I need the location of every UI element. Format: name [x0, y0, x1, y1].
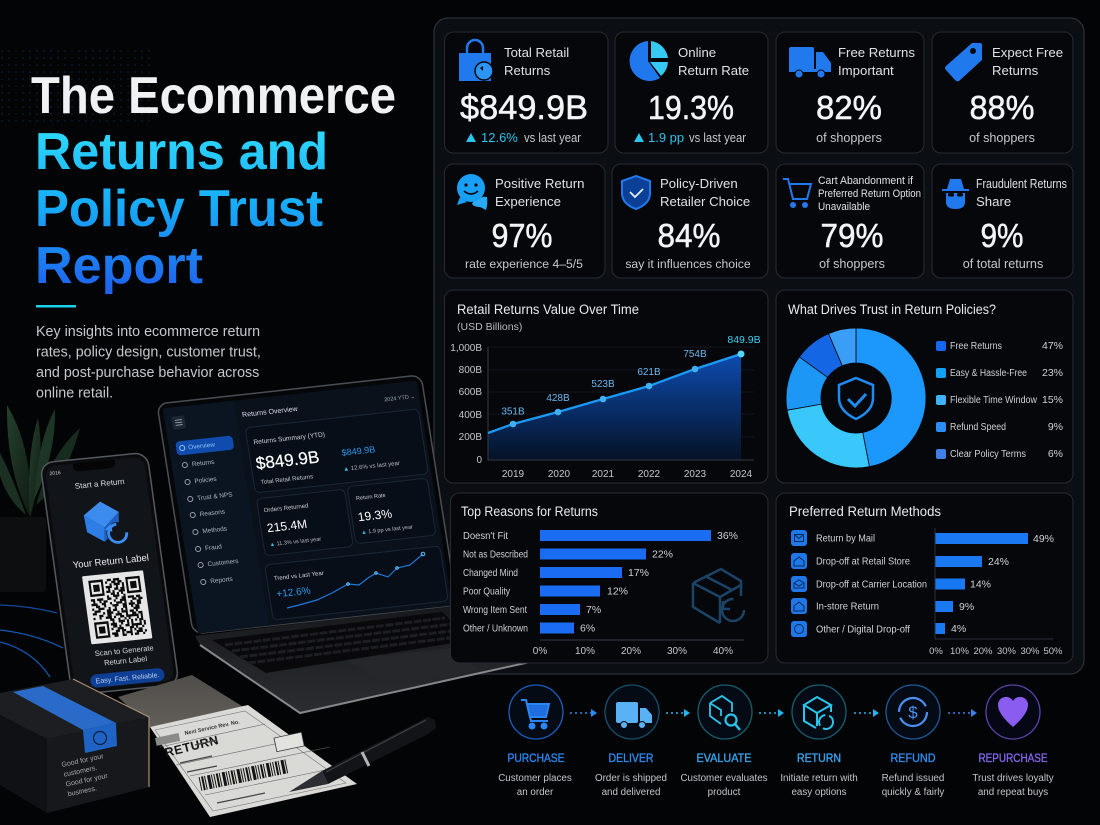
sidebar navigation: Trust & NPS [197, 491, 233, 502]
panel: trust drivers donut chart: What Drives Trust in Return Policies? [788, 302, 996, 317]
x axis labels: 10% [950, 646, 970, 657]
values: 17% [628, 567, 649, 579]
x axis labels: 40% [713, 646, 733, 657]
returns summary card: $849.9B [341, 444, 376, 458]
main dashboard panel [434, 18, 1084, 674]
screen header: 2024 YTD ⌄ [384, 394, 416, 403]
y axis labels: 800B [459, 365, 482, 376]
x axis labels: 2023 [684, 469, 707, 480]
KPI card: policy-driven retailer choice: 84% [658, 217, 720, 254]
y axis labels: 400B [459, 410, 482, 421]
returns summary card: Returns Summary (YTD) [253, 431, 326, 446]
KPI card: online return rate: Online [678, 45, 716, 60]
gift box with blue strip: Good for your [61, 753, 105, 769]
KPI card: expect free returns: of shoppers [969, 131, 1035, 145]
sidebar navigation: Reports [210, 576, 233, 585]
process step: evaluate: Customer evaluates [680, 773, 768, 784]
legend: 15% [1042, 394, 1063, 406]
KPI card: total retail returns: 12.6% [481, 130, 518, 145]
return shipping label: Next Service Rev. No. [184, 719, 241, 737]
x axis labels: 2024 [730, 469, 753, 480]
category labels: Poor Quality [463, 586, 510, 598]
subtitle text: online retail. [36, 386, 113, 402]
KPI card: policy-driven retailer choice: Policy-Driven [660, 176, 738, 191]
orders returned card: 215.4M [266, 517, 308, 535]
subtitle text: rates, policy design, customer trust, [36, 344, 261, 360]
process step: deliver [595, 685, 667, 798]
process step: evaluate: product [708, 787, 741, 798]
panel: retail returns line chart: Retail Returns Value Over Time [457, 302, 639, 317]
process step: evaluate: EVALUATE [696, 751, 752, 765]
panel: preferred return methods: Preferred Return Methods [789, 504, 941, 519]
values: 6% [580, 622, 595, 634]
bars [935, 533, 1028, 634]
x axis labels: 30% [667, 646, 687, 657]
method labels: Other / Digital Drop-off [816, 624, 910, 636]
icon: shopping bag with return [459, 40, 493, 81]
subtitle text: Key insights into ecommerce return [36, 324, 260, 340]
x axis labels: 2022 [638, 469, 661, 480]
values: 14% [970, 578, 991, 590]
values: 9% [959, 601, 974, 613]
laptop base and keyboard [195, 604, 560, 714]
KPI card: fraudulent returns share [932, 164, 1073, 278]
icon: box with magnifier [710, 696, 740, 730]
KPI card: online return rate: 1.9 pp [648, 130, 684, 145]
sidebar navigation: Returns [191, 459, 215, 468]
data labels: 754B [683, 349, 707, 360]
category labels: Not as Described [463, 550, 528, 560]
icon: faded return box [693, 569, 744, 623]
sidebar navigation: Fraud [205, 543, 223, 552]
subtitle text: and post-purchase behavior across [36, 365, 259, 381]
process step: return [780, 685, 858, 798]
legend: 9% [1048, 421, 1063, 433]
legend: Easy & Hassle-Free [950, 368, 1027, 379]
x axis labels: 20% [973, 646, 993, 657]
reassurance pill: Easy. Fast. Reliable. [95, 672, 160, 685]
phone showing return label [40, 452, 179, 695]
title: The Ecommerce [31, 67, 396, 125]
legend: Free Returns [950, 341, 1002, 352]
icon: truck [616, 702, 652, 728]
x axis labels: 0% [533, 646, 547, 657]
title: Policy Trust [35, 180, 323, 238]
process step: refund [882, 685, 944, 798]
icon: price tag [945, 43, 982, 81]
process step: repurchase: Trust drives loyalty [972, 773, 1054, 784]
data labels: 849.9B [727, 334, 761, 346]
y axis labels [450, 343, 482, 466]
KPI card: total retail returns: vs last year [524, 131, 581, 145]
laptop [157, 375, 560, 714]
KPI card: expect free returns: Expect Free [992, 45, 1063, 60]
return rate card [347, 478, 436, 544]
returns summary card [245, 409, 428, 493]
KPI card: free returns important: Important [838, 63, 894, 78]
values: 36% [717, 530, 738, 542]
arrow [666, 709, 690, 717]
return shipping label: RETURN [163, 733, 220, 760]
return rate card: ▲ 1.9 pp vs last year [361, 524, 414, 536]
KPI card: total retail returns: $849.9B [460, 89, 588, 127]
icon: pie chart [630, 41, 668, 81]
y axis labels: 200B [459, 432, 482, 443]
KPI card: cart abandonment: of shoppers [819, 257, 885, 271]
values [951, 533, 1054, 635]
panel: retail returns line chart [444, 290, 768, 483]
blue ripple arcs [0, 605, 63, 677]
x axis labels [502, 469, 753, 480]
values: 7% [586, 604, 601, 616]
donut chart [786, 328, 926, 468]
KPI card: free returns important [776, 32, 924, 153]
KPI card: free returns important: of shoppers [816, 131, 882, 145]
legend: Flexible Time Window [950, 395, 1038, 406]
return rate card: Return Rate [356, 493, 386, 502]
KPI card: online return rate: 19.3% [648, 89, 734, 126]
return shipping label [150, 705, 357, 817]
process step: repurchase: and repeat buys [978, 787, 1048, 798]
sidebar navigation: Policies [194, 476, 217, 485]
legend: 6% [1048, 448, 1063, 460]
KPI card: online return rate [615, 32, 768, 153]
gift box with blue strip: business. [67, 785, 98, 798]
values [580, 530, 738, 634]
x axis labels: 2021 [592, 469, 615, 480]
sidebar navigation: Reasons [199, 509, 226, 518]
KPI card: total retail returns: Total Retail [504, 45, 569, 60]
x axis labels: 50% [1043, 646, 1063, 657]
y axis labels: 0 [476, 455, 482, 466]
laptop trend line [287, 552, 425, 608]
KPI card: positive return experience: rate experience 4–5/5 [465, 257, 583, 271]
panel: retail returns line chart: (USD Billions) [457, 321, 522, 333]
KPI card: cart abandonment: 79% [820, 217, 884, 254]
pen [289, 717, 436, 792]
KPI card: cart abandonment: Unavailable [818, 201, 870, 213]
panel: top reasons bar chart [450, 493, 768, 663]
legend: Clear Policy Terms [950, 449, 1026, 460]
KPI card: cart abandonment: Cart Abandonment if [818, 175, 914, 187]
barcode [200, 766, 288, 784]
icon: shield check [622, 176, 650, 209]
panel: preferred return methods [776, 493, 1073, 663]
reassurance pill [90, 668, 165, 688]
sidebar navigation: Methods [202, 526, 228, 535]
process step: deliver: and delivered [602, 787, 660, 798]
KPI card: free returns important: Free Returns [838, 45, 915, 60]
KPI card: fraudulent returns share: Share [976, 194, 1011, 209]
KPI card: online return rate: vs last year [689, 131, 746, 145]
process step: purchase: Customer places [498, 773, 572, 784]
icon: heart [998, 697, 1028, 727]
phone showing return label: 2016 [49, 470, 61, 477]
sidebar navigation: Overview [188, 441, 216, 451]
phone showing return label: Return Label [104, 654, 148, 667]
data labels: 428B [546, 393, 570, 404]
icon: delivery truck [789, 47, 831, 78]
process step: refund: Refund issued [882, 773, 944, 784]
legend: 47% [1042, 340, 1063, 352]
process step: repurchase [972, 685, 1054, 798]
icon: cart [521, 700, 549, 728]
icon: box with return arrow [82, 499, 130, 547]
icon: hooded spy [942, 179, 969, 209]
sidebar navigation [175, 435, 255, 587]
title: Returns and [35, 123, 328, 181]
icon: shield check [839, 378, 873, 419]
trend card: +12.6% [276, 586, 312, 600]
bars [540, 530, 711, 634]
data labels: 351B [501, 406, 525, 418]
panel: top reasons bar chart: Top Reasons for Returns [461, 504, 598, 519]
KPI card: positive return experience: 97% [492, 217, 552, 254]
orders returned card [256, 489, 353, 556]
phone showing return label: Your Return Label [72, 553, 150, 571]
values: 12% [607, 586, 628, 598]
method labels: Drop-off at Carrier Location [816, 580, 927, 590]
category labels: Other / Unknown [463, 624, 528, 634]
trend card: Trend vs Last Year [274, 571, 324, 582]
process step: purchase: an order [517, 787, 554, 798]
category labels: Doesn't Fit [463, 531, 508, 542]
legend: Refund Speed [950, 422, 1006, 433]
KPI card: cart abandonment: Preferred Return Option [818, 188, 921, 200]
process step: evaluate [680, 685, 768, 798]
title: Report [35, 237, 203, 295]
process step: refund: REFUND [890, 751, 936, 765]
returns summary card: $849.9B [254, 447, 321, 473]
laptop screen dashboard [157, 375, 457, 634]
gift box with blue strip: Good for your [65, 773, 109, 789]
y axis labels: 600B [459, 387, 482, 398]
arrow [570, 709, 597, 717]
x axis labels: 30% [1020, 646, 1040, 657]
KPI card: expect free returns: Returns [992, 63, 1039, 78]
trend card [265, 546, 448, 620]
gift box with blue strip: customers. [63, 765, 98, 779]
process step: repurchase: REPURCHASE [978, 751, 1048, 765]
return rate card: 19.3% [357, 507, 393, 524]
icon: smiling chat bubble [457, 174, 487, 210]
legend [936, 340, 1063, 460]
KPI card: fraudulent returns share: of total returns [963, 257, 1043, 271]
sidebar navigation: Customers [207, 558, 239, 568]
x axis labels: 0% [929, 646, 943, 657]
data labels: 523B [591, 379, 615, 390]
x axis labels: 30% [997, 646, 1017, 657]
process step: deliver: Order is shipped [595, 773, 667, 784]
arrow [759, 709, 784, 717]
subtitle text [36, 324, 261, 402]
method labels: In-store Return [816, 602, 879, 612]
process step: return: easy options [791, 787, 847, 798]
data labels: 621B [637, 367, 661, 378]
icon: shopping cart [783, 179, 811, 207]
x axis labels [533, 646, 733, 657]
title [31, 67, 396, 295]
KPI card: expect free returns [932, 32, 1073, 153]
values: 4% [951, 623, 966, 635]
process step: return: RETURN [797, 751, 841, 765]
method icons [791, 530, 807, 637]
hamburger menu [171, 415, 186, 430]
values: 49% [1033, 533, 1054, 545]
legend: 23% [1042, 367, 1063, 379]
chart area and line [488, 347, 754, 460]
icon: box with refresh [804, 697, 833, 729]
KPI card: free returns important: 82% [816, 89, 882, 126]
KPI card: positive return experience: Experience [495, 194, 561, 209]
screen header [242, 393, 416, 419]
process step: purchase [498, 685, 572, 798]
KPI card: positive return experience [444, 164, 605, 278]
icon: dollar refund: $ [908, 703, 918, 722]
plant in pot [0, 405, 80, 592]
process step: refund: quickly & fairly [882, 787, 944, 798]
phone showing return label: Start a Return [74, 477, 125, 491]
data labels [501, 334, 761, 418]
category labels: Wrong Item Sent [463, 605, 527, 616]
method labels [816, 534, 927, 636]
method labels: Drop-off at Retail Store [816, 556, 910, 568]
KPI card: policy-driven retailer choice [612, 164, 768, 278]
category labels [463, 531, 528, 634]
KPI card: cart abandonment [776, 164, 924, 278]
x axis labels: 10% [575, 646, 595, 657]
process step: purchase: PURCHASE [508, 751, 564, 765]
values: 24% [988, 556, 1009, 568]
values: 22% [652, 548, 673, 560]
phone showing return label: Scan to Generate [94, 643, 154, 658]
gift box with blue strip [0, 679, 149, 813]
orders returned card: ▲ 11.3% vs last year [269, 537, 322, 548]
method labels: Return by Mail [816, 534, 875, 544]
x axis labels: 20% [621, 646, 641, 657]
returns summary card: ▲ 12.6% vs last year [343, 461, 400, 473]
KPI card: fraudulent returns share: Fraudulent Returns [976, 176, 1067, 191]
x axis labels: 2020 [548, 469, 571, 480]
process step: deliver: DELIVER [608, 751, 654, 765]
KPI card: policy-driven retailer choice: say it influences choice [625, 257, 751, 271]
KPI card: online return rate: Return Rate [678, 63, 749, 78]
panel: trust drivers donut chart [776, 290, 1073, 483]
KPI card: positive return experience: Positive Return [495, 176, 584, 191]
returns summary card: Total Retail Returns [261, 474, 314, 486]
arrow [948, 709, 977, 717]
orders returned card: Orders Returned [263, 503, 309, 514]
mat under phone [118, 675, 245, 727]
arrow [854, 709, 879, 717]
KPI card: total retail returns: Returns [504, 63, 551, 78]
y axis labels: 1,000B [450, 343, 482, 354]
category labels: Changed Mind [463, 568, 518, 579]
KPI card: expect free returns: 88% [970, 89, 1034, 126]
KPI card: fraudulent returns share: 9% [980, 217, 1024, 254]
screen header: Returns Overview [242, 406, 299, 419]
KPI card: policy-driven retailer choice: Retailer Choice [660, 194, 750, 209]
x axis labels [929, 646, 1063, 657]
x axis labels: 2019 [502, 469, 525, 480]
QR code [82, 570, 152, 644]
process step: return: Initiate return with [780, 773, 858, 784]
KPI card: total retail returns [444, 32, 608, 153]
